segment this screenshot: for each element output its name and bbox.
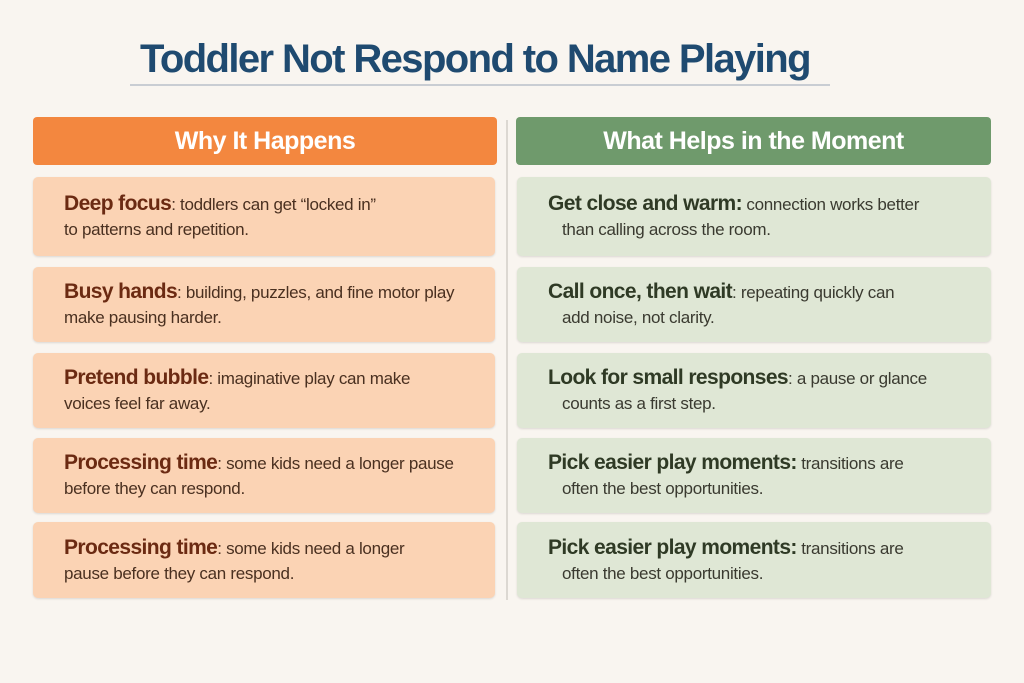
card: processing time	[33, 438, 495, 513]
card: busy hands: Busy hands: building, puzzles, and fine motor play	[64, 280, 454, 303]
card: busy hands	[33, 267, 495, 342]
card: small responses: counts as a first step.	[562, 394, 716, 413]
header: why it happens: Why It Happens	[175, 127, 355, 155]
card: processing time 2: Processing time: some kids need a longer	[64, 536, 404, 558]
header: what helps	[516, 117, 991, 165]
card: pretend bubble: voices feel far away.	[64, 394, 210, 413]
card: easier moments	[517, 438, 991, 513]
card: easier moments: Pick easier play moments: transitions are	[548, 451, 904, 474]
card: pretend bubble: Pretend bubble: imaginative play can make	[64, 366, 410, 389]
card: processing time: before they can respond.	[64, 479, 245, 498]
card: easier moments 2: often the best opportunities.	[562, 564, 763, 582]
card: busy hands: make pausing harder.	[64, 308, 222, 327]
card: call once: Call once, then wait: repeating quickly can	[548, 280, 894, 303]
card: call once	[517, 267, 991, 342]
card: small responses	[517, 353, 991, 428]
card: easier moments 2	[517, 522, 991, 598]
card: processing time 2: pause before they can respond.	[64, 564, 294, 582]
card: pretend bubble	[33, 353, 495, 428]
card: get close	[517, 177, 991, 256]
card: small responses: Look for small responses: a pause or glance	[548, 366, 927, 389]
card: easier moments: often the best opportunities.	[562, 479, 763, 498]
card: get close: than calling across the room.	[562, 220, 771, 239]
header: what helps: What Helps in the Moment	[603, 127, 904, 155]
card: deep focus: Deep focus: toddlers can get “locked in”	[64, 192, 376, 215]
card: call once: add noise, not clarity.	[562, 308, 714, 327]
card: processing time: Processing time: some kids need a longer pause	[64, 451, 454, 474]
header: why it happens	[33, 117, 497, 165]
card: get close: Get close and warm: connection works better	[548, 192, 919, 215]
card: easier moments 2: Pick easier play moments: transitions are	[548, 536, 904, 558]
title: Toddler Not Respond to Name Playing	[140, 37, 810, 81]
card: processing time 2	[33, 522, 495, 598]
card: deep focus: to patterns and repetition.	[64, 220, 249, 239]
card: deep focus	[33, 177, 495, 256]
